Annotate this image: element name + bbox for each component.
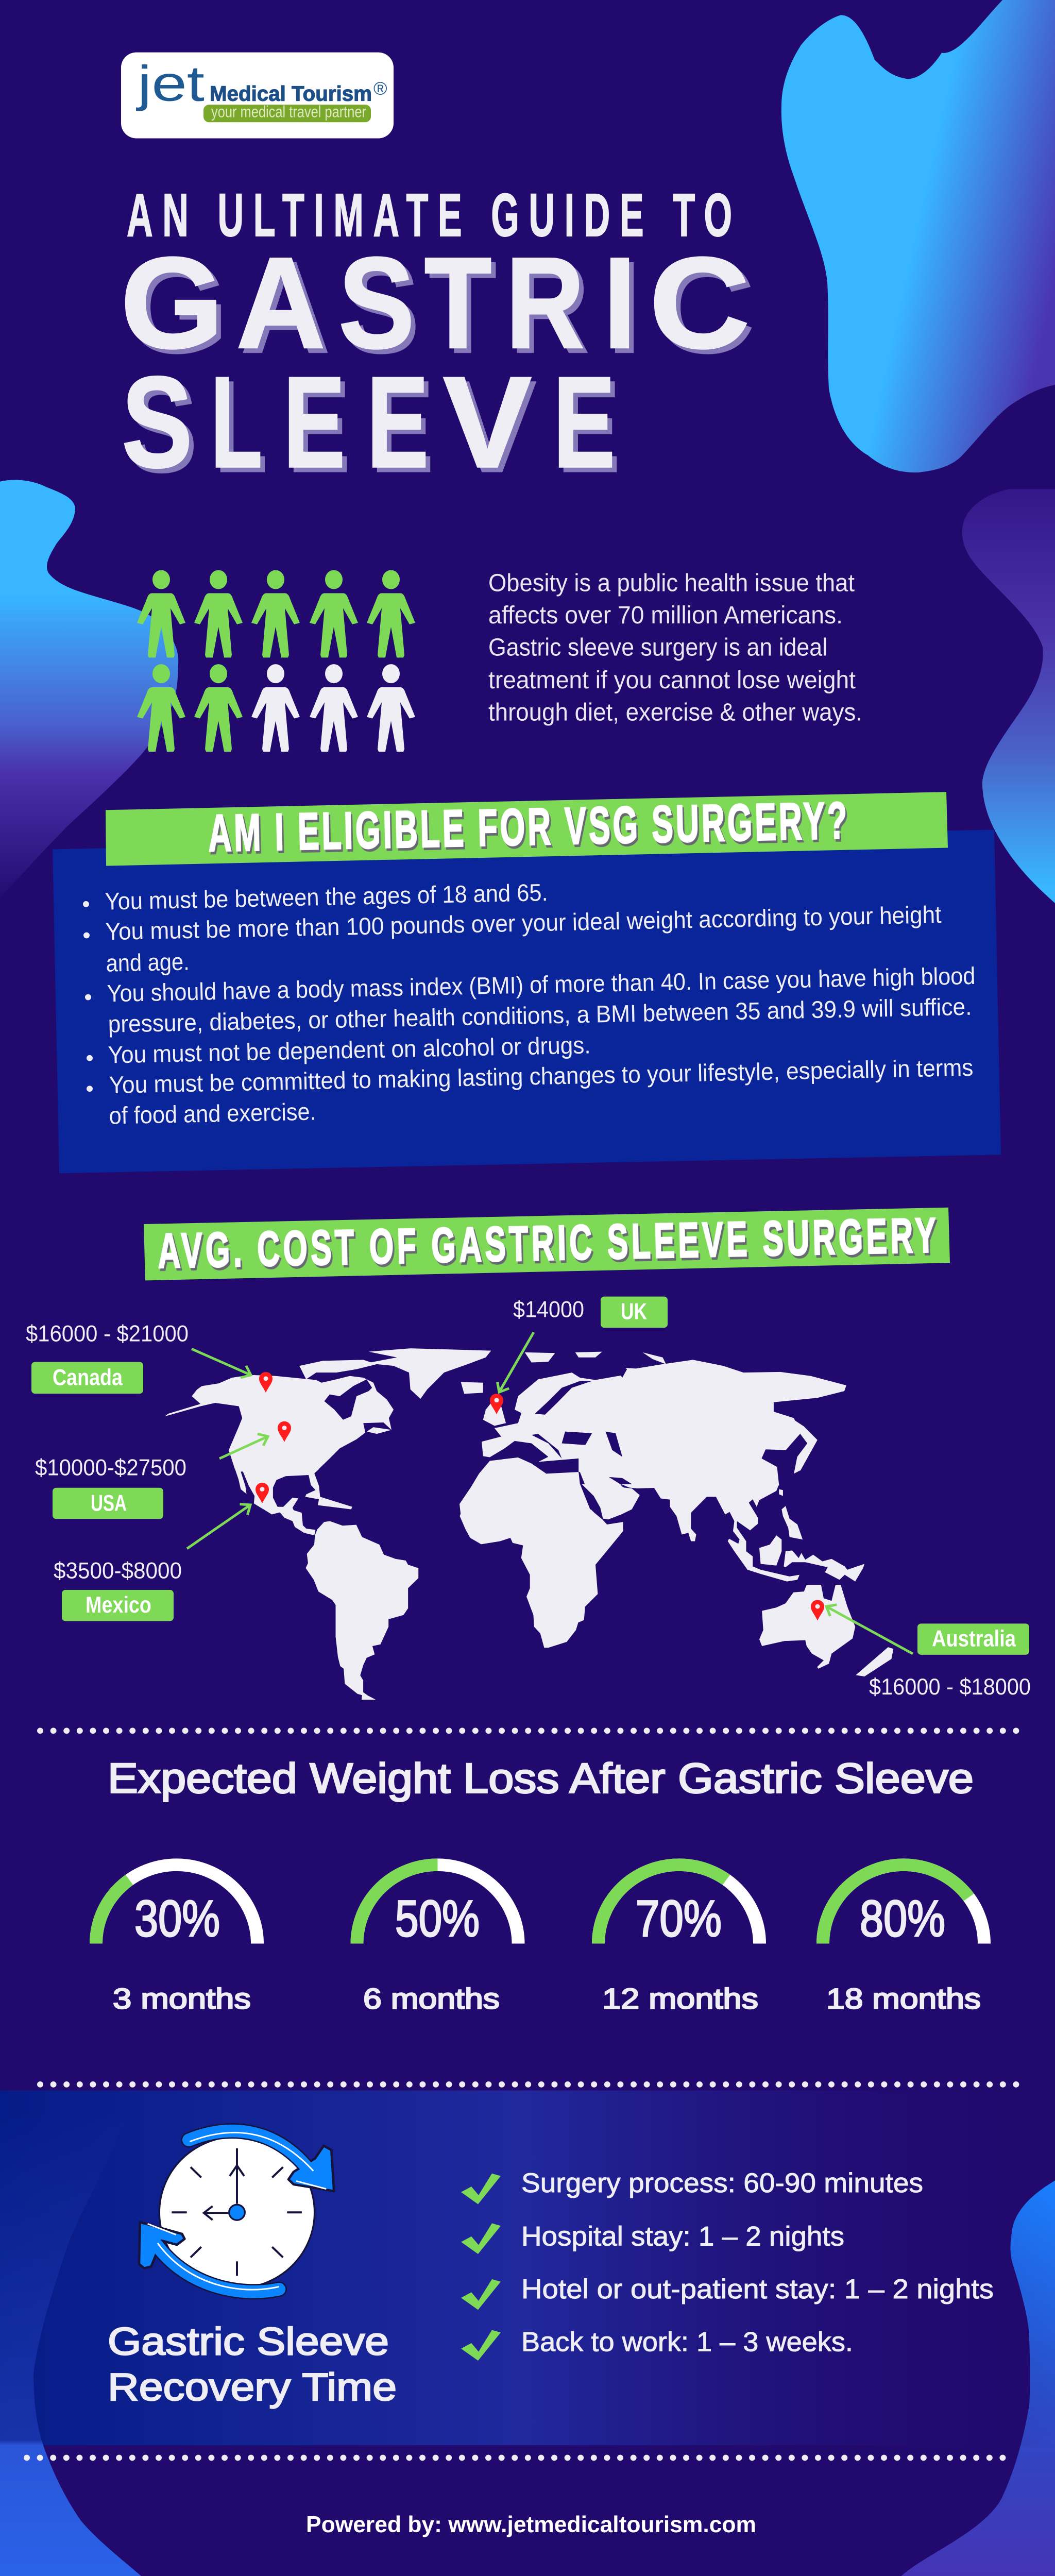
gauge: 30 percent (96, 1865, 258, 2014)
logo (121, 53, 394, 139)
label: canada (26, 1320, 189, 1394)
text: obesity intro: affects over 70 million Americans. (488, 601, 843, 629)
gauge: 50 percent (357, 1865, 518, 2014)
gauge: 70 percent: 12 months (602, 1982, 758, 2014)
logo: ® (373, 78, 387, 98)
label: usa: $10000-$27500 (35, 1454, 186, 1480)
blob: top right (781, 0, 1055, 472)
heading: average cost: AVG. COST OF GASTRIC SLEEVE SURGERY (157, 1207, 937, 1278)
logo: jet (135, 55, 205, 111)
title: gastric: C (649, 231, 750, 376)
text: recovery list (521, 2168, 994, 2357)
title: gastric (121, 230, 750, 376)
label: uk: $14000 (513, 1296, 584, 1323)
label: usa: USA (91, 1490, 127, 1516)
blob: left middle (0, 480, 178, 899)
text: obesity intro: Gastric sleeve surgery is an ideal (488, 634, 827, 661)
title: sleeve: S (122, 350, 193, 495)
recovery band background (0, 2091, 1055, 2445)
text: obesity intro (488, 569, 862, 726)
eligibility bullet list (83, 879, 976, 1130)
text: obesity intro: treatment if you cannot lose weight (488, 666, 856, 694)
gauge: 30 percent: 30% (134, 1890, 220, 1947)
chart: world map (165, 1332, 913, 1700)
title: sleeve: L (211, 350, 262, 495)
label: mexico: $3500-$8000 (54, 1557, 182, 1583)
heading: expected weight loss: Expected Weight Loss After Gastric Sleeve (108, 1754, 974, 1802)
title: gastric: A (236, 230, 326, 376)
text: recovery list: Back to work: 1 – 3 weeks. (521, 2327, 853, 2357)
eligibility bullet list: You should have a body mass index (BMI) of more than 40. In case you have high blood (107, 962, 976, 1007)
eligibility bullet list: and age. (106, 948, 190, 977)
text: recovery heading: Recovery Time (108, 2366, 397, 2409)
title: gastric: R (506, 230, 584, 376)
title: gastric: I (603, 231, 636, 376)
text: recovery list: Hotel or out-patient stay: 1 – 2 nights (521, 2274, 994, 2304)
gauge: 80 percent: 80% (860, 1890, 945, 1947)
eligibility bullet list: You must be more than 100 pounds over your ideal weight according to your height (105, 902, 942, 945)
heading: eligibility: AM I ELIGIBLE FOR VSG SURGERY? (208, 791, 847, 862)
label: mexico (54, 1557, 182, 1621)
text: obesity intro: through diet, exercise & other ways. (488, 699, 862, 726)
eligibility bullet list: of food and exercise. (109, 1098, 316, 1130)
gauge: 30 percent: 3 months (113, 1982, 251, 2014)
title: sleeve: E (367, 350, 429, 495)
panel: eligibility (53, 829, 1001, 1173)
map pins (256, 1372, 824, 1621)
label: uk (513, 1296, 668, 1328)
upper arrow (189, 2131, 334, 2191)
text: obesity intro: Obesity is a public health issue that (488, 569, 855, 597)
logo: Medical Tourism (210, 81, 372, 105)
title: gastric: G (121, 231, 224, 376)
gauge: 50 percent: 6 months (363, 1982, 500, 2014)
gauge: 70 percent (599, 1865, 759, 2014)
icons: check marks (461, 2174, 501, 2361)
text: footer: Powered by: www.jetmedicaltourism.com (306, 2512, 756, 2537)
gauge: 80 percent: 18 months (826, 1982, 981, 2014)
text: recovery list: Surgery process: 60-90 minutes (521, 2168, 923, 2198)
text: recovery list: Hospital stay: 1 – 2 nights (521, 2222, 844, 2251)
eligibility bullet list: pressure, diabetes, or other health conditions, a BMI between 35 and 39.9 will suffice. (108, 993, 972, 1038)
logo: your medical travel partner (211, 103, 366, 121)
gauge: 80 percent (823, 1865, 984, 2014)
blob: bottom right (901, 2180, 1055, 2576)
title: gastric: T (424, 230, 491, 376)
icon: clock with arrows (139, 2131, 334, 2292)
label: australia: Australia (932, 1625, 1016, 1651)
label: canada: Canada (53, 1364, 123, 1390)
text: recovery heading: Gastric Sleeve (108, 2320, 389, 2363)
label: mexico: Mexico (86, 1591, 151, 1618)
label: australia: $16000 - $18000 (869, 1674, 1031, 1700)
title: sleeve (122, 350, 615, 495)
title: sleeve: E (283, 350, 345, 495)
title: gastric: S (338, 231, 415, 376)
eligibility bullet list: You must be between the ages of 18 and 65. (105, 879, 548, 915)
title: sleeve: V (443, 350, 532, 495)
title: an ultimate guide to: AN ULTIMATE GUIDE TO (127, 181, 732, 249)
gauge: 70 percent: 70% (636, 1890, 722, 1947)
lower arrow (139, 2222, 279, 2292)
text: recovery heading (108, 2320, 397, 2409)
label: canada: $16000 - $21000 (26, 1320, 189, 1346)
icon: people grid (137, 570, 415, 752)
blob: right middle (962, 489, 1055, 903)
eligibility bullet list: You must be committed to making lasting changes to your lifestyle, especially in terms (109, 1054, 974, 1099)
gauge: 50 percent: 50% (395, 1890, 480, 1947)
title: sleeve: E (553, 350, 615, 495)
label: australia (869, 1623, 1031, 1700)
label: uk: UK (621, 1298, 647, 1324)
eligibility bullet list: You must not be dependent on alcohol or drugs. (108, 1032, 591, 1069)
label: usa (35, 1454, 186, 1519)
map arrows (187, 1332, 913, 1654)
blob: bottom left (0, 2113, 141, 2576)
